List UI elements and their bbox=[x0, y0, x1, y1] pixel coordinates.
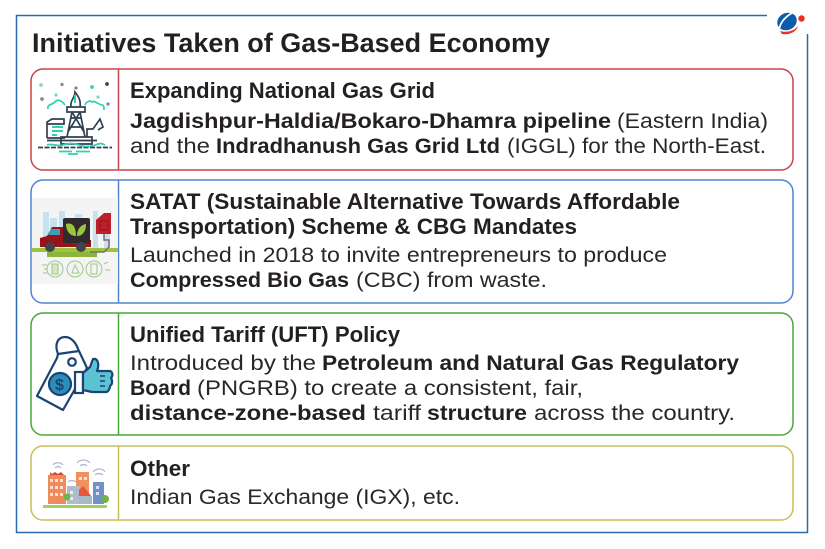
heading: Unified Tariff (UFT) Policy bbox=[130, 322, 401, 347]
panel: Expanding National Gas Grid bbox=[31, 69, 793, 170]
body text: (CBC) from waste. bbox=[356, 269, 547, 292]
heading: SATAT (Sustainable Alternative Towards Affordable bbox=[130, 189, 680, 214]
logo icon bbox=[774, 10, 805, 34]
body text: Compressed Bio Gas bbox=[130, 269, 349, 292]
body text bbox=[130, 110, 768, 158]
heading: Other bbox=[130, 456, 190, 481]
icon: price tag with thumbs up: $ bbox=[55, 377, 64, 394]
body text: Indian Gas Exchange (IGX), etc. bbox=[130, 486, 460, 509]
icon: bio gas truck bbox=[32, 198, 118, 284]
body text: (IGGL) for the North-East. bbox=[507, 135, 766, 158]
body text: distance-zone-based bbox=[130, 402, 366, 425]
heading: Transportation) Scheme & CBG Mandates bbox=[130, 214, 577, 239]
body text: Indradhanush Gas Grid Ltd bbox=[216, 135, 500, 158]
body text: Introduced by the bbox=[130, 352, 316, 375]
body text: (PNGRB) to create a consistent, fair, bbox=[197, 377, 583, 400]
title: Initiatives Taken of Gas-Based Economy bbox=[32, 28, 550, 58]
panel: SATAT scheme bbox=[31, 180, 793, 303]
heading bbox=[130, 189, 680, 239]
body text bbox=[130, 352, 739, 425]
body text: tariff bbox=[373, 402, 421, 425]
body text: across the country. bbox=[534, 402, 735, 425]
body text: structure bbox=[427, 402, 527, 425]
body text: Jagdishpur-Haldia/Bokaro-Dhamra pipeline bbox=[130, 110, 611, 133]
heading: Expanding National Gas Grid bbox=[130, 78, 435, 103]
body text bbox=[130, 244, 667, 292]
body text: Board bbox=[130, 377, 191, 400]
icon: oil rig bbox=[38, 83, 112, 154]
panel: Unified Tariff Policy bbox=[31, 313, 793, 435]
icon: connected buildings bbox=[43, 460, 109, 508]
panel: Other bbox=[31, 446, 793, 520]
icon: price tag with thumbs up bbox=[37, 337, 112, 410]
body text: Launched in 2018 to invite entrepreneurs to produce bbox=[130, 244, 667, 267]
body text: Petroleum and Natural Gas Regulatory bbox=[322, 352, 739, 375]
body text: and the bbox=[130, 135, 210, 158]
body text: (Eastern India) bbox=[617, 110, 768, 133]
